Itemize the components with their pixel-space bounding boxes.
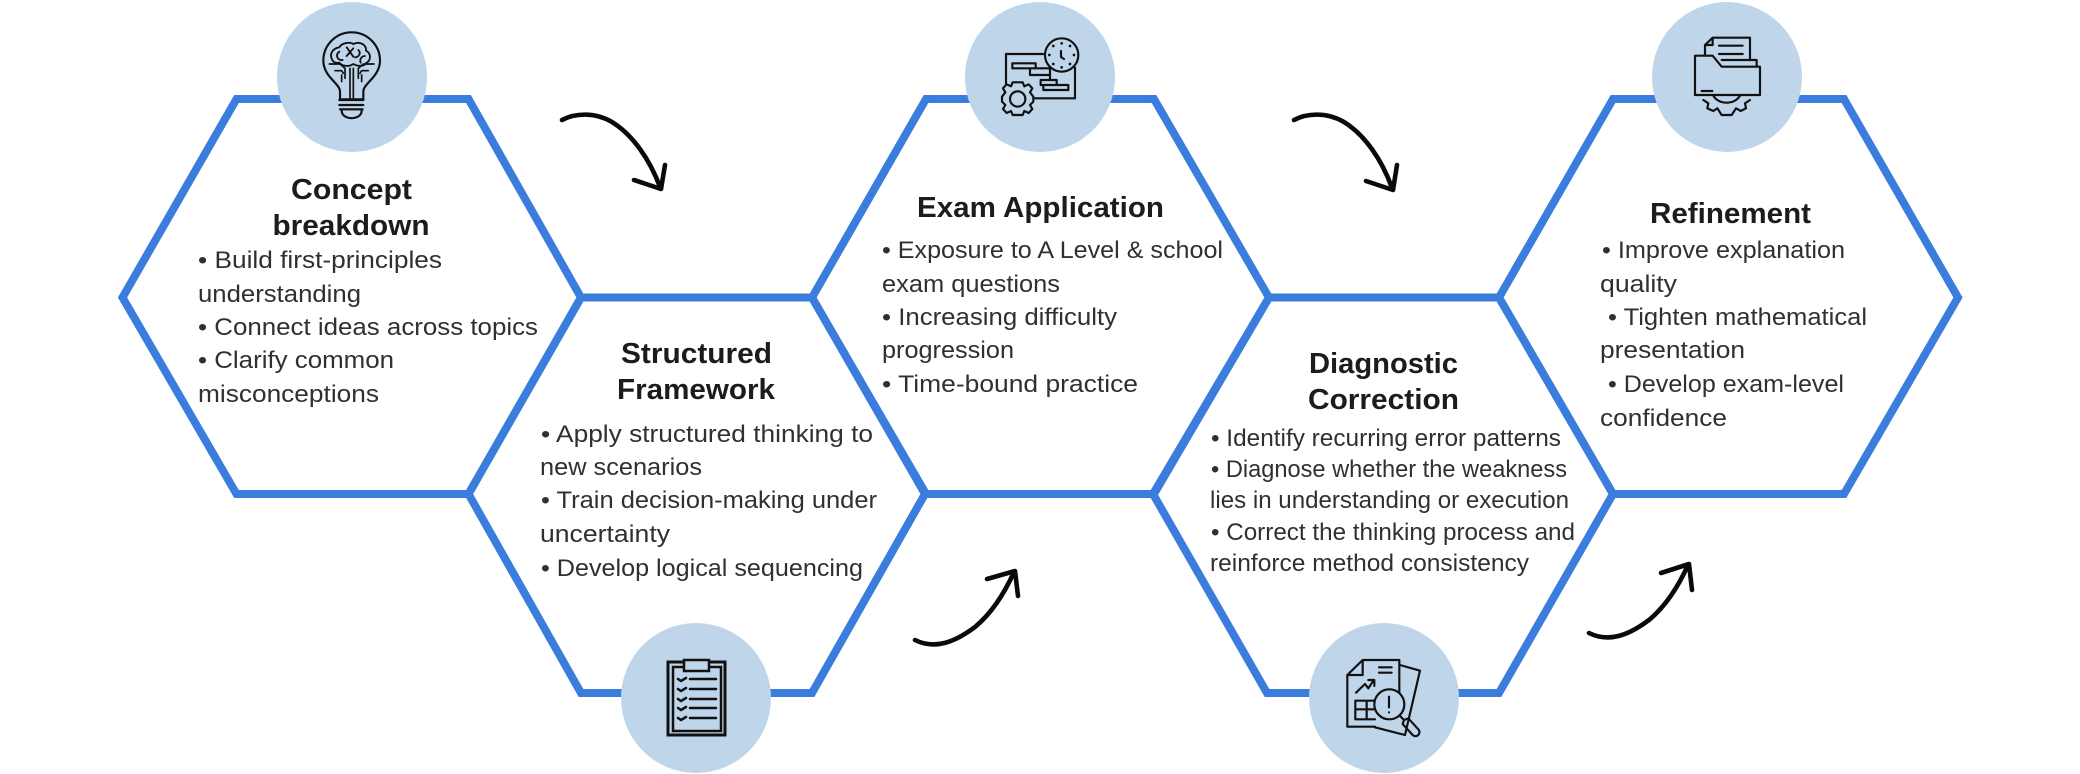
panel: concept breakdown (122, 2, 581, 494)
hexagon outline (1153, 298, 1613, 693)
heading: concept breakdown: breakdown (272, 210, 430, 242)
bullet list: refinement: • Improve explanation (1602, 237, 1845, 264)
icon circle: clipboard checklist (621, 623, 771, 773)
arrow: structured framework to exam application (915, 571, 1018, 644)
bullet list: structured framework (540, 421, 877, 582)
bullet list: exam application: • Increasing difficulty (882, 304, 1117, 331)
heading: structured framework: Framework (617, 374, 776, 406)
heading: refinement: Refinement (1650, 198, 1811, 230)
bullet list: concept breakdown: understanding (198, 281, 361, 308)
bullet list: structured framework: • Apply structured thinking to (541, 421, 873, 448)
bullet list: concept breakdown: • Build first-principles (198, 247, 442, 274)
bullet list: structured framework: • Develop logical sequencing (541, 555, 863, 582)
bullet list: exam application: progression (882, 337, 1014, 364)
heading: concept breakdown: Concept (291, 174, 412, 206)
heading: structured framework: Structured (621, 338, 772, 370)
icon circle: folder with gear (1652, 2, 1802, 152)
bullet list: exam application (882, 237, 1223, 398)
icon circle: report with magnifier (1309, 623, 1459, 773)
bullet list: structured framework: uncertainty (540, 521, 670, 548)
bullet list: concept breakdown (198, 247, 538, 408)
hexagon outline (1499, 99, 1958, 494)
arrow: exam application to diagnostic correction (1294, 115, 1397, 190)
bullet list: diagnostic correction: • Diagnose whether the weakness (1211, 456, 1567, 483)
bullet list: exam application: • Time-bound practice (882, 371, 1138, 398)
icon circle: schedule chart with clock and gear (965, 2, 1115, 152)
bullet list: refinement: quality (1600, 271, 1677, 298)
bullet list: diagnostic correction: reinforce method consistency (1210, 550, 1529, 577)
bullet list: refinement: presentation (1600, 337, 1745, 364)
icon circle: light bulb with brain (277, 2, 427, 152)
bullet list: concept breakdown: • Clarify common (198, 347, 394, 374)
bullet list: exam application: exam questions (882, 271, 1060, 298)
bullet list: concept breakdown: misconceptions (198, 381, 379, 408)
arrow: diagnostic correction to refinement (1589, 564, 1692, 637)
bullet list: structured framework: • Train decision-making under (541, 487, 877, 514)
bullet list: diagnostic correction: • Correct the thinking process and (1211, 519, 1575, 546)
heading: diagnostic correction (1308, 348, 1459, 416)
bullet list: refinement: confidence (1600, 405, 1727, 432)
bullet list: exam application: • Exposure to A Level & school (882, 237, 1223, 264)
bullet list: refinement: • Develop exam-level (1608, 371, 1844, 398)
panel: exam application (812, 2, 1269, 494)
heading: concept breakdown (272, 174, 430, 242)
arrow: concept breakdown to structured framework (562, 115, 665, 189)
heading: structured framework (617, 338, 776, 406)
bullet list: diagnostic correction: • Identify recurring error patterns (1211, 425, 1561, 452)
bullet list: concept breakdown: • Connect ideas across topics (198, 314, 538, 341)
bullet list: refinement (1600, 237, 1867, 432)
hexagon outline (468, 298, 925, 693)
panel: diagnostic correction (1153, 298, 1613, 773)
bullet list: structured framework: new scenarios (540, 454, 702, 481)
heading: exam application: Exam Application (917, 192, 1164, 224)
hexagon outline (122, 99, 581, 494)
bullet list: diagnostic correction: lies in understanding or execution (1210, 487, 1569, 514)
panel: refinement (1499, 2, 1958, 494)
bullet list: refinement: • Tighten mathematical (1608, 304, 1867, 331)
bullet list: diagnostic correction (1210, 425, 1575, 577)
hexagon outline (812, 99, 1269, 494)
heading: diagnostic correction: Diagnostic (1309, 348, 1458, 380)
panel: structured framework (468, 298, 925, 773)
heading: diagnostic correction: Correction (1308, 384, 1459, 416)
